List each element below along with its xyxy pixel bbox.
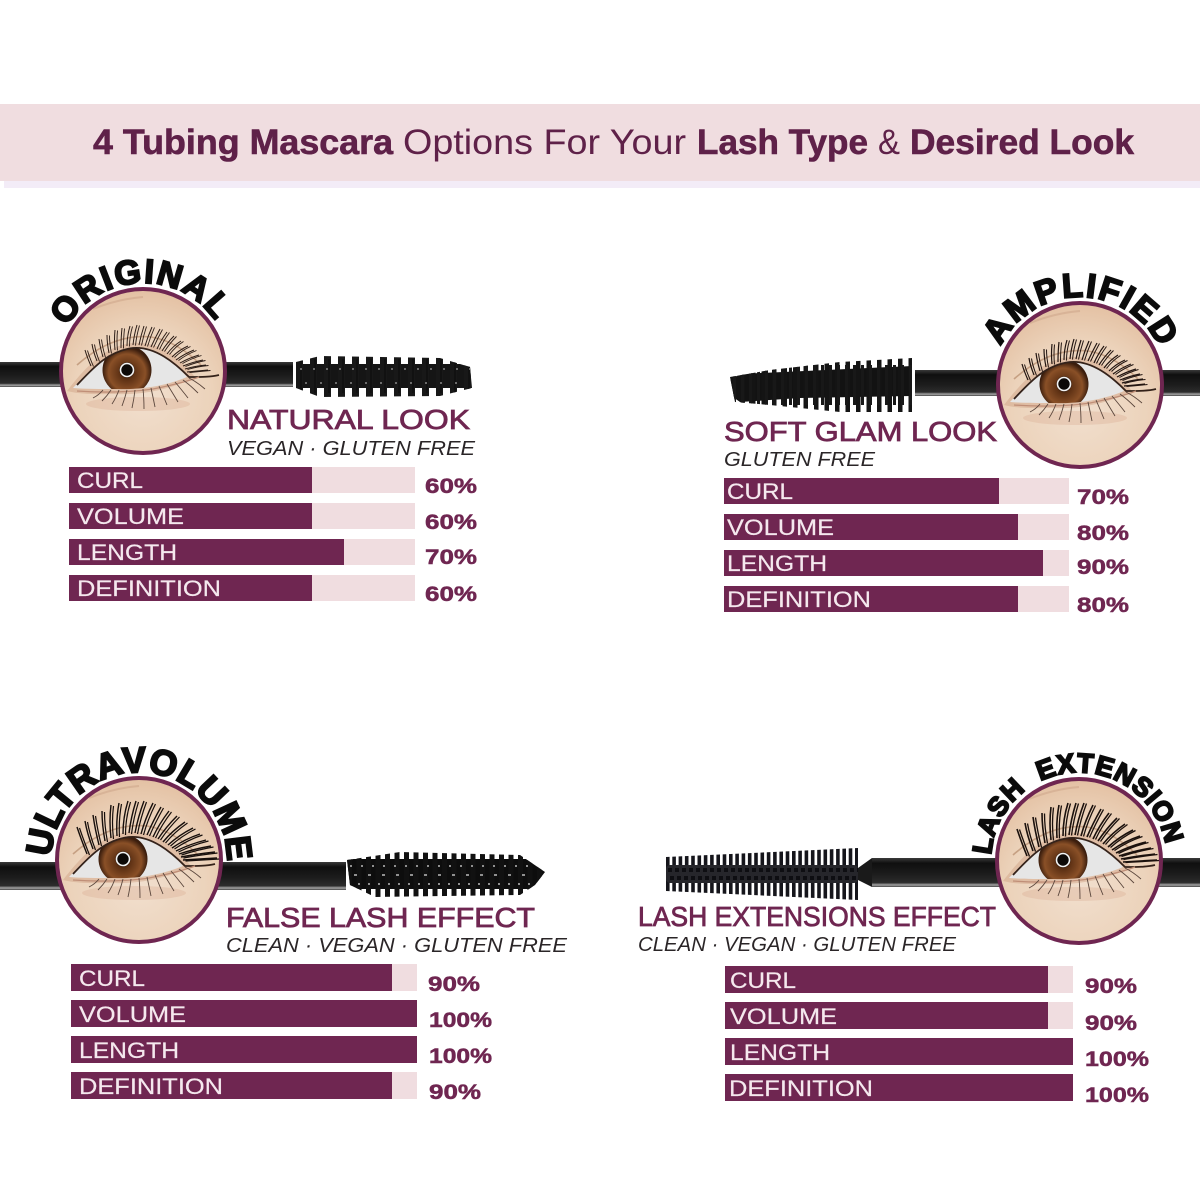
panel: lash extension: [638, 752, 1200, 1107]
bar: curl 60%: 60%: [425, 475, 477, 498]
claims: gluten free: GLUTEN FREE: [724, 448, 875, 471]
bar: curl 90%: 90%: [428, 973, 480, 996]
bar: volume 60%: 60%: [425, 511, 477, 534]
bar: definition 100%: 100%: [1085, 1084, 1149, 1107]
heading: false lash effect: FALSE LASH EFFECT: [226, 902, 535, 933]
bar: definition 100%: DEFINITION: [729, 1076, 873, 1101]
bar: length 100%: LENGTH: [79, 1038, 179, 1063]
bar: volume 100%: 100%: [429, 1009, 492, 1032]
title: &: [878, 123, 900, 162]
bar: definition 100%: [725, 1074, 1149, 1107]
curved label: LASH EXTENSION: LASH EXTENSION: [972, 752, 1185, 854]
bar: curl 90%: CURL: [730, 968, 796, 993]
bar: volume 100%: [71, 1000, 492, 1032]
eye photo circle: original: [61, 289, 225, 453]
bar: volume 60%: VOLUME: [77, 504, 184, 529]
bar: definition 90%: [71, 1072, 481, 1104]
bar: volume 60%: [69, 503, 477, 534]
bar: length 100%: 100%: [429, 1045, 492, 1068]
bar: volume 100%: VOLUME: [79, 1002, 186, 1027]
curved label: ORIGINAL: ORIGINAL: [52, 258, 226, 322]
panel: original: [0, 258, 477, 606]
bar: length 100%: LENGTH: [730, 1040, 830, 1065]
bar: volume 80%: VOLUME: [727, 515, 834, 540]
bar: definition 60%: [69, 575, 477, 606]
bar: curl 70%: 70%: [1077, 486, 1129, 509]
bar: definition 80%: [724, 586, 1129, 617]
title: Desired Look: [910, 123, 1135, 162]
eye photo circle: amplified: [998, 303, 1162, 467]
title: Options For Your: [403, 123, 686, 162]
bar: curl 70%: CURL: [727, 479, 793, 504]
bar: definition 80%: DEFINITION: [727, 587, 871, 612]
panel: amplified: [724, 273, 1200, 617]
bar: definition 90%: DEFINITION: [79, 1074, 223, 1099]
curved label: AMPLIFIED: AMPLIFIED: [984, 273, 1176, 347]
title banner: [0, 104, 1200, 188]
bar: length 70%: 70%: [425, 546, 477, 569]
bar: definition 90%: 90%: [429, 1081, 481, 1104]
bar: volume 90%: 90%: [1085, 1012, 1137, 1035]
curved label: ULTRAVOLUME: ULTRAVOLUME: [25, 746, 254, 861]
mascara wand: lash extension: [666, 858, 1200, 887]
eye photo circle: lash extension: [997, 779, 1161, 943]
bar: definition 80%: 80%: [1077, 594, 1129, 617]
bar: curl 90%: [71, 964, 480, 996]
bar: length 90%: 90%: [1077, 556, 1129, 579]
bar: volume 90%: [725, 1002, 1137, 1035]
heading: lash extensions effect: LASH EXTENSIONS EFFECT: [638, 901, 996, 932]
panel: ultravolume: [0, 746, 568, 1104]
bar: length 70%: LENGTH: [77, 540, 177, 565]
bar: definition 60%: 60%: [425, 583, 477, 606]
mascara wand: amplified: [730, 366, 1200, 402]
mascara wand: original: [0, 362, 472, 387]
bar: volume 90%: VOLUME: [730, 1004, 837, 1029]
heading: soft glam look: SOFT GLAM LOOK: [724, 416, 997, 447]
bar: volume 80%: [724, 514, 1129, 545]
claims: clean vegan gluten free: CLEAN · VEGAN · GLUTEN FREE: [226, 934, 567, 957]
bar: curl 90%: CURL: [79, 966, 145, 991]
bar: length 70%: [69, 539, 477, 569]
bar: length 100%: [725, 1038, 1149, 1071]
bar: curl 60%: CURL: [77, 468, 143, 493]
eye photo circle: ultravolume: [57, 778, 221, 942]
bar: volume 80%: 80%: [1077, 522, 1129, 545]
bar: curl 70%: [724, 478, 1129, 509]
title: 4 Tubing Mascara: [93, 123, 394, 162]
claims: clean vegan gluten free: CLEAN · VEGAN · GLUTEN FREE: [638, 933, 956, 956]
bar: length 90%: [724, 550, 1129, 579]
title: Lash Type: [697, 123, 868, 162]
bar: curl 90%: 90%: [1085, 975, 1137, 998]
bar: length 90%: LENGTH: [727, 551, 827, 576]
bar: length 100%: 100%: [1085, 1048, 1149, 1071]
bar: curl 90%: [725, 966, 1137, 998]
mascara wand: ultravolume: [0, 862, 545, 890]
bar: definition 60%: DEFINITION: [77, 576, 221, 601]
claims: vegan gluten free: VEGAN · GLUTEN FREE: [227, 437, 475, 460]
title: [93, 123, 1135, 162]
heading: natural look: NATURAL LOOK: [227, 404, 470, 435]
bar: length 100%: [71, 1036, 492, 1068]
bar: curl 60%: [69, 467, 477, 498]
